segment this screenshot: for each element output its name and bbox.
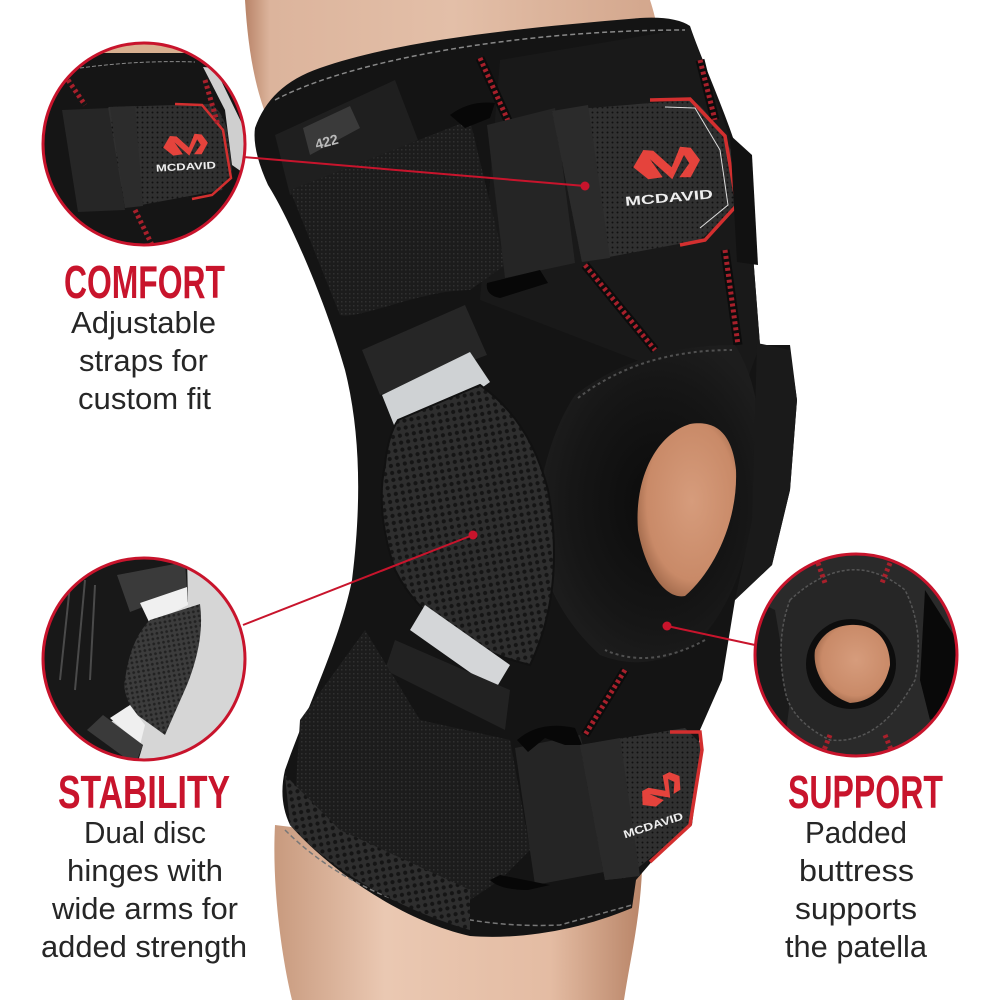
- upper panel: [480, 28, 760, 400]
- text: comfort description: [71, 305, 216, 416]
- lower McDavid buckle: MCDAVID: [622, 811, 685, 841]
- right outer pad: [735, 343, 797, 600]
- heading: COMFORT: COMFORT: [64, 256, 225, 308]
- lower velcro strap: [295, 630, 530, 900]
- upper leg: [245, 0, 660, 125]
- hinge slide upper: [362, 305, 490, 440]
- upper strap band: [487, 108, 575, 278]
- hinge slide lower: [385, 605, 510, 730]
- text: support description: the patella: [785, 929, 928, 964]
- inset circle: comfort strap: [40, 40, 250, 250]
- upper McDavid buckle: [552, 99, 737, 262]
- hinge pad: [382, 385, 554, 665]
- photo: knee brace on leg: [245, 0, 797, 1000]
- logo: [633, 147, 700, 179]
- upper McDavid buckle: MCDAVID: [624, 186, 713, 209]
- text: comfort description: Adjustable: [71, 305, 216, 340]
- 422 tab: 422: [313, 131, 340, 152]
- text: support description: buttress: [799, 853, 914, 888]
- lower strap band: [515, 735, 615, 885]
- text: support description: Padded: [805, 815, 907, 850]
- upper D-ring: [450, 102, 548, 298]
- text: support description: supports: [795, 891, 917, 926]
- text: stability description: hinges with: [67, 853, 223, 888]
- text: support description: [785, 815, 928, 964]
- upper velcro strap: [290, 120, 505, 316]
- brace body: [255, 18, 797, 937]
- lower D-ring: [490, 726, 582, 890]
- text: stability description: added strength: [41, 929, 247, 964]
- knee opening: [638, 423, 736, 596]
- inset circle: stability hinge: [40, 555, 245, 765]
- text: comfort description: custom fit: [78, 381, 211, 416]
- lower leg: [274, 825, 642, 1000]
- text: stability description: wide arms for: [51, 891, 238, 926]
- text: stability description: [41, 815, 247, 964]
- right velcro tab: [730, 135, 758, 265]
- inset circle: comfort strap: MCDAVID: [156, 160, 216, 175]
- text: comfort description: straps for: [79, 343, 208, 378]
- pointer: stability: [243, 530, 478, 625]
- lower mesh band: [285, 775, 470, 930]
- patella pad ring: [535, 345, 760, 662]
- text: stability description: Dual disc: [84, 815, 206, 850]
- pointer: support: [662, 622, 755, 645]
- 422 tab: [275, 80, 418, 195]
- stitch lines: [275, 30, 738, 925]
- inset circle: support buttress: [755, 554, 957, 756]
- lower McDavid buckle: [580, 728, 702, 880]
- heading: STABILITY: STABILITY: [58, 766, 230, 818]
- pointer: comfort: [243, 157, 590, 190]
